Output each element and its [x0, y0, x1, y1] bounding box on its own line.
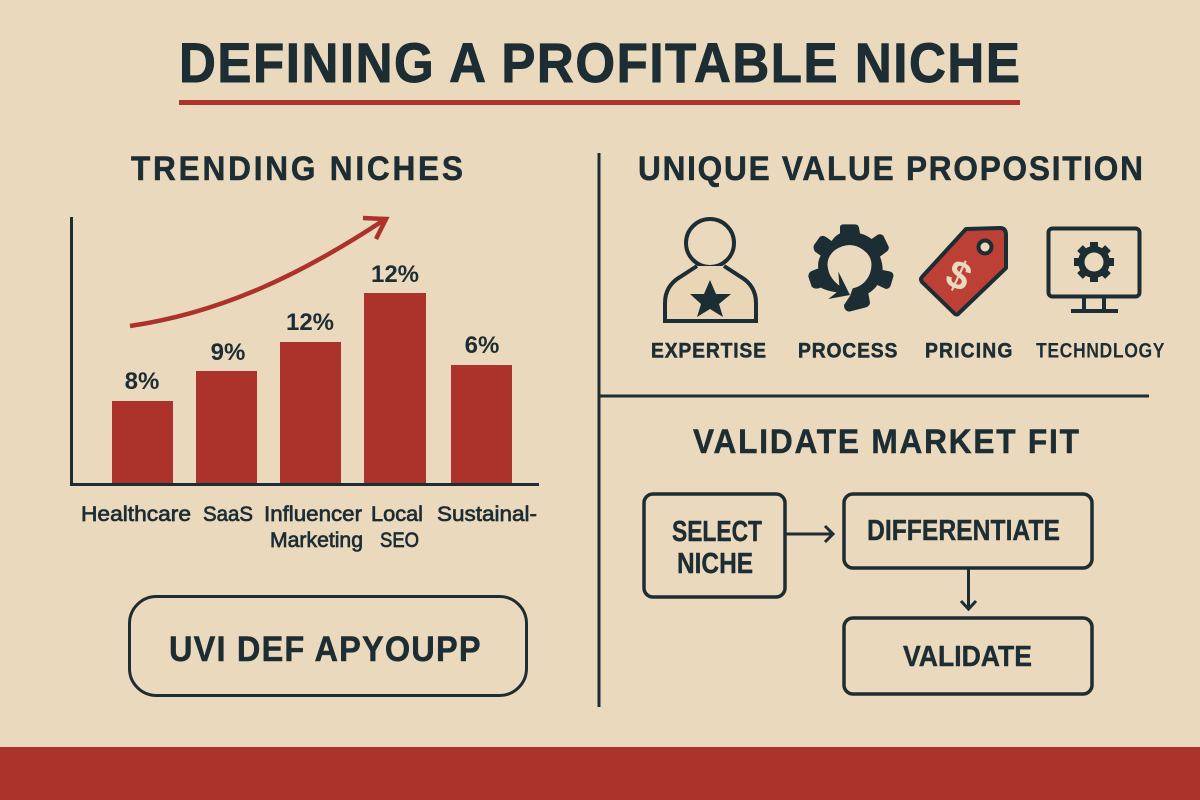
category labels: SaaS [203, 502, 253, 526]
callout box [130, 596, 526, 696]
callout box: UVI DEF APYOUPP [169, 630, 481, 669]
chart axes [72, 217, 539, 484]
icon: pricing tag: $ [939, 251, 978, 301]
label: process: PROCESS [798, 340, 897, 363]
flow box: select niche: NICHE [677, 548, 753, 580]
panel: trending niches [72, 149, 539, 695]
category labels: Influencer [264, 502, 362, 526]
bar value labels: 12% [286, 309, 334, 336]
category labels: Healthcare [81, 502, 191, 526]
arrow: differentiate to validate [961, 568, 976, 609]
bar value labels: 9% [211, 339, 245, 366]
arrow: select to differentiate [786, 526, 833, 542]
category labels: SEO [380, 528, 419, 552]
horizontal divider [600, 394, 1149, 398]
label: pricing: PRICING [925, 340, 1012, 363]
label: technology: TECHNDLOGY [1036, 339, 1165, 363]
title underline [179, 100, 1020, 105]
panel: validate market fit [644, 422, 1092, 694]
category labels: Sustainal- [437, 502, 537, 526]
panel: unique value proposition [638, 149, 1165, 363]
category labels: Local [371, 502, 423, 526]
title: DEFINING A PROFITABLE NICHE [179, 33, 1020, 94]
flow box: validate [844, 618, 1092, 694]
vertical divider [598, 153, 600, 707]
heading: trending niches: TRENDING NICHES [131, 149, 463, 187]
flow box: select niche [644, 494, 785, 597]
category labels: Marketing [270, 528, 363, 552]
icon: pricing tag [921, 228, 1006, 314]
footer band [0, 747, 1200, 800]
bar value labels: 6% [465, 332, 499, 359]
category labels [81, 502, 537, 552]
flow box: validate: VALIDATE [903, 641, 1032, 673]
label: expertise: EXPERTISE [651, 340, 766, 363]
arrow: upward trend [130, 218, 386, 326]
flow box: differentiate: DIFFERENTIATE [867, 515, 1060, 547]
heading: unique value proposition: UNIQUE VALUE PROPOSITION [638, 149, 1143, 187]
bar chart [72, 217, 539, 552]
bar value labels: 12% [371, 261, 419, 288]
flow box: differentiate [844, 494, 1092, 568]
icon: process gear with arrow [808, 224, 893, 312]
icon: expertise person with star [665, 219, 756, 321]
flow box: select niche: SELECT [672, 516, 762, 548]
bar value labels: 8% [125, 368, 159, 395]
heading: validate market fit: VALIDATE MARKET FIT [693, 422, 1079, 460]
icon: technology monitor with gear [1048, 228, 1140, 313]
bar value labels [125, 261, 499, 395]
bars [112, 293, 512, 483]
